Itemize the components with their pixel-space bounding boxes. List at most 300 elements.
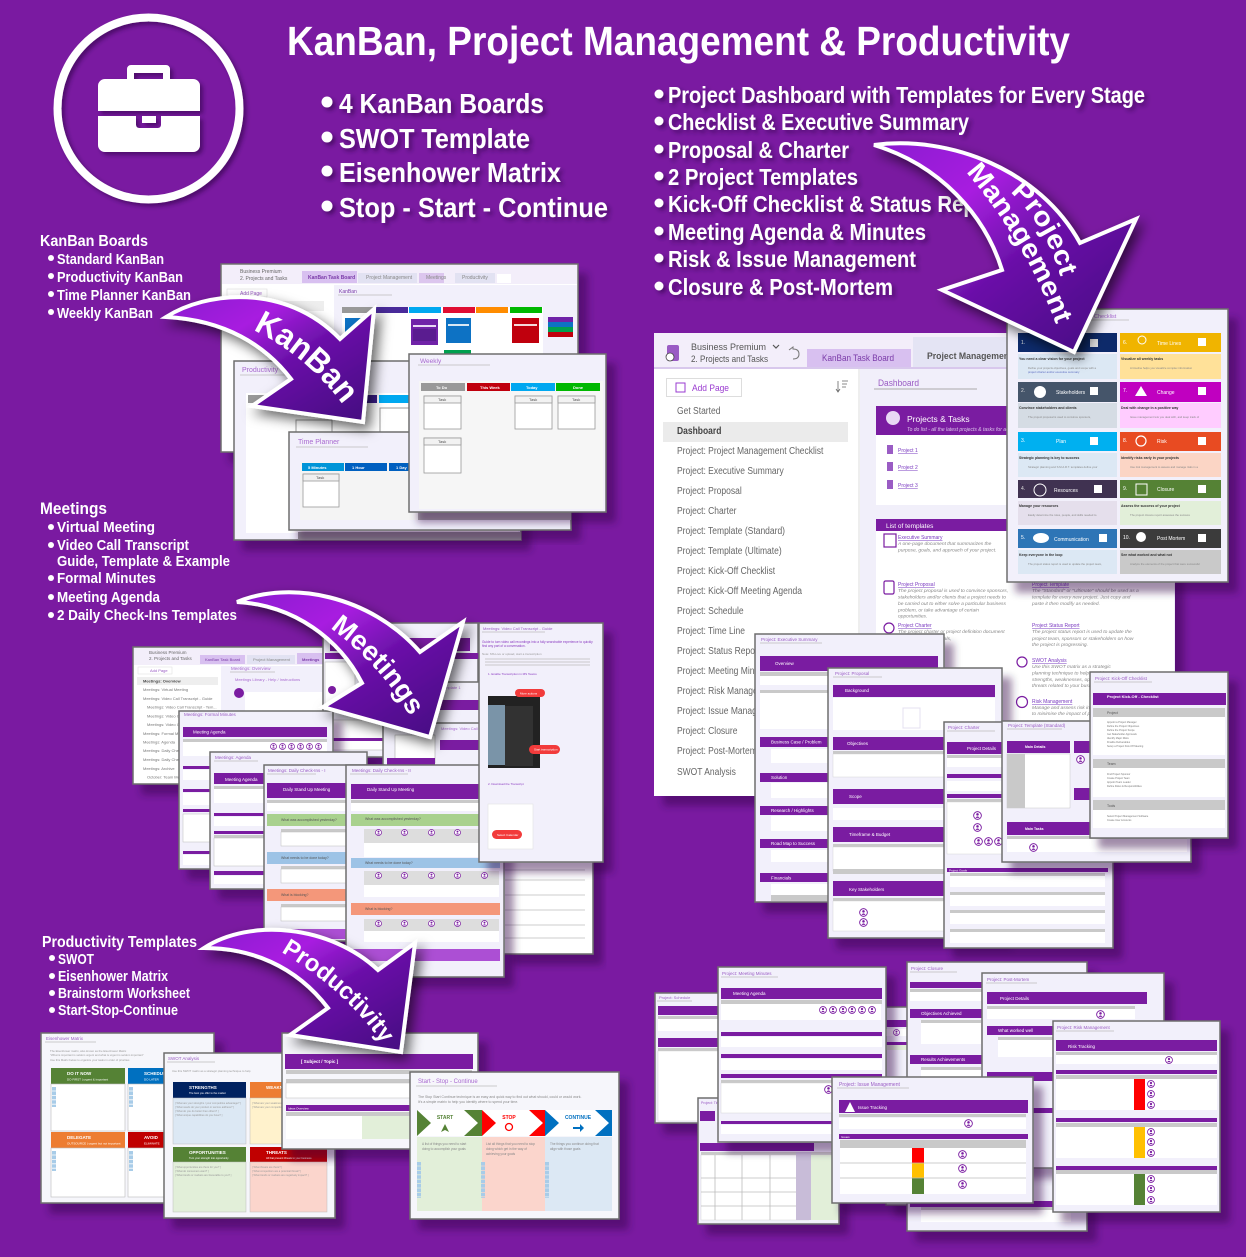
panel: KanBan Task Board screenshot: KanBan: [339, 289, 357, 295]
checklist tile 3: Strategic planning is key to success: [1019, 456, 1079, 460]
panel: Weekly KanBan screenshot: To Do: [436, 385, 448, 390]
panel: Meetings Daily Check-Ins II: What needs to be done today?: [365, 861, 413, 865]
list: Productivity Templates: Brainstorm Worksheet: [58, 985, 190, 1002]
panel: SWOT Analysis: SWOT Analysis: [168, 1056, 200, 1061]
panel: Project Management dashboard screenshot: strengths, weaknesses, opportunities, and: [1032, 677, 1124, 683]
panel: Start Stop Continue: Start - Stop - Continue: [418, 1079, 478, 1085]
checklist tile 4: [1018, 480, 1117, 525]
panel: Project Kick-Off Checklist: Find Project Sponsor: [1107, 773, 1131, 776]
panel: Project Management dashboard screenshot: SWOT Analysis: [1032, 658, 1067, 664]
panel: Project Kick-Off Checklist: [1090, 672, 1228, 838]
panel: Project Management dashboard screenshot: people involved.: [897, 642, 933, 648]
panel: Project Template Standard: Main Tasks: [1025, 827, 1044, 831]
panel: Video Call Transcript guide: 2. Download the Transcript: [488, 782, 524, 786]
panel: Project Kick-Off Checklist: Finalize Deliverables: [1107, 741, 1131, 744]
panel: Project Proposal: Timeframe & Budget: [849, 832, 891, 837]
panel: Project Issue Management: Issues: [841, 1135, 850, 1139]
panel: Start Stop Continue: CONTINUE: [565, 1115, 592, 1121]
checklist tile 8: [1120, 432, 1221, 477]
panel: Start Stop Continue: START: [437, 1115, 453, 1121]
panel: Project Kick-Off Checklist: Identify Major Risks: [1107, 737, 1130, 740]
sidebar page list: [677, 405, 824, 778]
panel: Project Management dashboard screenshot: stakeholders and/or clients that a project needs to: [898, 594, 1006, 600]
button: Add Page: [666, 378, 742, 396]
panel: Brainstorm Worksheet: [282, 1033, 478, 1149]
list: Productivity Templates: Eisenhower Matrix: [58, 968, 169, 985]
panel: Meeting Overview screenshot: Meetings: Archive: [143, 766, 175, 771]
feature list: left column: [322, 88, 608, 223]
sidebar page list: Project: Post-Mortem: [677, 745, 757, 757]
feature list: right column: 2 Project Templates: [668, 164, 858, 190]
arrow: Meetings: [236, 588, 477, 752]
panel: Meeting Overview screenshot: Project Management: [253, 657, 291, 662]
panel: KanBan Task Board screenshot: 2. Projects and Tasks: [240, 276, 288, 282]
list: Meetings: Video Call Transcript: [57, 537, 189, 554]
feature list: right column: Project Dashboard with Templates for Every Stage: [668, 82, 1145, 108]
panel: Project Management dashboard screenshot: Project Proposal: [898, 582, 935, 588]
checklist tile 9: Closure: [1157, 487, 1174, 493]
panel: SWOT Analysis: [ What do consumers want? ]: [175, 1169, 209, 1173]
panel: Project Template Standard: Main Details: [1025, 745, 1045, 749]
panel: Meetings Daily Check-Ins I: What is blocking?: [281, 893, 308, 897]
panel: Project Risk Management: Risk Tracking: [1068, 1044, 1096, 1049]
panel: Eisenhower Matrix: DELEGATE: [67, 1135, 91, 1140]
panel: Project Meeting Minutes: Meeting Agenda: [733, 991, 766, 996]
sidebar page list: Project: Executive Summary: [677, 465, 784, 477]
arrow: Productivity: [197, 924, 430, 1066]
list: KanBan Boards: Standard KanBan: [57, 251, 164, 268]
sidebar page list: Project: Time Line: [677, 625, 745, 637]
panel: Project Management dashboard screenshot: purpose, goals, and approach of your project.: [897, 548, 996, 554]
panel: Project Schedule: [655, 993, 723, 1123]
panel: Eisenhower Matrix: [41, 1033, 214, 1203]
panel: SWOT Analysis: Use this SWOT matrix as a strategic planning technique to help: [172, 1069, 251, 1073]
feature list: right column: Risk & Issue Management: [668, 246, 916, 272]
panel: Project Issue Management: [832, 1077, 1033, 1203]
panel: Project Kick-Off Checklist: Setup a Project Kick-Off Meeting: [1107, 745, 1144, 748]
panel: Project Closure: Results Achievements: [921, 1057, 966, 1062]
feature list: right column: Meeting Agenda & Minutes: [668, 219, 926, 245]
panel: Video Call Transcript example: [383, 723, 483, 773]
panel: Eisenhower Matrix: DO IT NOW: [67, 1071, 92, 1076]
panel: Meeting Overview screenshot: Meetings: Daily Chec: [143, 748, 181, 753]
checklist tile 9: Assess the success of your project: [1121, 504, 1181, 508]
panel: Project Post-Mortem: What worked well: [998, 1028, 1033, 1033]
feature list: left column: SWOT Template: [339, 123, 530, 154]
checklist tile 3: Plan: [1056, 439, 1066, 445]
panel: Project Charter: Project Details: [967, 746, 997, 751]
panel: Start Stop Continue: It's a simple matrix to help you identify where to spend your time.: [418, 1100, 518, 1104]
panel: SWOT Analysis: Turn your strength into opportunity: [189, 1156, 229, 1160]
checklist tile 6: A timeline helps you visualize complex information: [1130, 366, 1193, 370]
panel: SWOT Analysis: [ What trends or markets are negatively impact? ]: [252, 1173, 309, 1177]
list: Meetings: Formal Minutes: [57, 570, 156, 587]
panel: Start Stop Continue: doing which get in the way of: [486, 1147, 527, 1151]
panel: Project Management dashboard screenshot: Projects & Tasks: [907, 414, 970, 424]
list: Meetings: Virtual Meeting: [57, 519, 155, 536]
panel: SWOT Analysis: [ What opportunities are there for you? ]: [175, 1165, 221, 1169]
panel: SWOT Analysis: [ What trends or markets are favourable to you? ]: [175, 1173, 232, 1177]
panel: Project Time Line: Project: Time Line: [701, 1101, 729, 1105]
panel: Video Call Transcript guide: find any part of a conversation.: [482, 644, 526, 648]
panel: SWOT Analysis: [ What do you do better than others? ]: [175, 1109, 219, 1113]
panel: Start Stop Continue: The things you continue doing that: [550, 1142, 599, 1146]
panel: Video Call Transcript guide: Meetings: Video Call Transcript - Guide: [483, 626, 553, 631]
arrow: Project Management: Project: [1012, 180, 1076, 276]
panel: Meetings Daily Check-Ins II: Daily Stand Up Meeting: [367, 787, 415, 792]
panel: Project Kick-Off Checklist: Tools: [1107, 804, 1115, 808]
panel: Meetings Daily Check-Ins II: [346, 765, 504, 977]
panel: Meeting Overview screenshot: [133, 647, 333, 784]
panel: Project Management dashboard screenshot: Executive Summary: [898, 535, 943, 541]
panel: Project Kick-Off Checklist: Project: [1107, 711, 1118, 715]
list: Productivity Templates: SWOT: [58, 951, 94, 968]
checklist tile 7: [1120, 382, 1221, 428]
panel: Video Call Transcript guide: Start transcription: [534, 748, 558, 752]
list: KanBan Boards: Weekly KanBan: [57, 305, 153, 322]
sidebar page list: Project: Schedule: [677, 605, 744, 617]
feature list: left column: Stop - Start - Continue: [339, 192, 608, 223]
checklist tile 5: 5.: [1021, 535, 1025, 541]
panel: Start Stop Continue: List all things that you need to stop: [486, 1142, 535, 1146]
panel: Project Kick-Off Checklist: Create Project Team: [1107, 777, 1130, 780]
panel: Eisenhower Matrix: SCHEDULE: [144, 1071, 169, 1076]
checklist tile 6: Visualize all weekly tasks: [1121, 357, 1163, 361]
panel: Meeting Overview screenshot: 2. Projects and Tasks: [149, 656, 192, 661]
sidebar page list: Project: Template (Ultimate): [677, 545, 782, 557]
panel: KanBan Task Board screenshot: Add Page: [240, 291, 262, 297]
panel: Project Template Standard: Project: Template (Standard): [1008, 723, 1066, 728]
panel: Project Kick-Off Checklist: Appoint Team Leader: [1107, 781, 1131, 784]
panel: Project Issue Management: Project: Issue Management: [839, 1082, 900, 1088]
panel: Project Kick-Off Checklist: Appoint a Project Manager: [1107, 721, 1137, 724]
panel: Project Closure: Project: Closure: [911, 966, 944, 971]
panel: Meetings Formal Minutes: Meeting Agenda: [193, 730, 226, 734]
list: KanBan Boards: Time Planner KanBan: [57, 287, 191, 304]
panel: Project Management dashboard screenshot: Project Charter: [898, 623, 932, 629]
panel: Project Management dashboard screenshot: A one-page document that summarizes the: [897, 541, 992, 547]
panel: Project Management dashboard screenshot: threats related to your business.: [1032, 683, 1102, 689]
panel: Project Meeting Minutes: [718, 967, 886, 1142]
panel: Weekly KanBan screenshot: Task: [529, 397, 537, 402]
panel: Project Executive Summary: Road Map to Success: [771, 841, 816, 846]
panel: Time Planner screenshot: 5 Minutes: [308, 465, 327, 470]
panel: Project Closure: Objectives Achieved: [921, 1011, 962, 1016]
panel: SWOT Analysis: [ What are your weaknesses? ]: [252, 1101, 288, 1105]
checklist tile 4: 4.: [1021, 486, 1025, 492]
panel: Project Proposal: [828, 668, 1002, 938]
panel: Project Management dashboard screenshot: Project Status Report: [1032, 623, 1080, 629]
sidebar page list: Project: Proposal: [677, 485, 742, 497]
panel: Project Management dashboard screenshot: The project status report is used to update the: [1032, 629, 1132, 635]
panel: Time Planner screenshot: Time Planner: [298, 439, 340, 446]
panel: Meetings Daily Check-Ins II: What is blocking?: [365, 907, 392, 911]
panel: Start Stop Continue: align with those goals: [550, 1147, 581, 1151]
list: Meetings: [40, 499, 237, 624]
panel: Time Planner screenshot: Task: [316, 475, 324, 480]
panel: Meeting Overview screenshot: Meetings: Virtual Meeting: [143, 687, 188, 692]
panel: Project Kick-Off Checklist: Get Stakeholder Approvals: [1107, 733, 1137, 736]
panel: KanBan Task Board screenshot: Project Management: [366, 275, 413, 281]
panel: Meeting Overview screenshot: KanBan Task Board: [205, 657, 240, 662]
checklist tile 6: 6.: [1123, 340, 1127, 346]
checklist tile 1: project charter and/or executive summary: [1028, 370, 1080, 374]
panel: Video Call Transcript, blank transcript doc: [503, 800, 593, 954]
panel: Project Proposal: Project: Proposal: [835, 671, 869, 676]
panel: Meeting Overview screenshot: Meetings Library - Help / Instructions: [235, 677, 300, 682]
panel: Project Kick-Off Checklist: Define the Project Objectives: [1107, 725, 1140, 728]
panel: Project Management dashboard screenshot: to minimise the impact of problems: [1032, 711, 1108, 717]
checklist tile 10: [1120, 529, 1221, 574]
arrow: Meetings: Meetings: [332, 614, 420, 714]
panel: Eisenhower Matrix: Use this Matrix below to organize your tasks in order of priorities: [50, 1058, 130, 1062]
panel: Project Management dashboard screenshot: planning technique to help you identify: [1031, 670, 1116, 676]
panel: Meetings Daily Check-Ins I: What was accomplished yesterday?: [281, 818, 337, 822]
panel: Video Call Transcript example: Meetings: Video Call Tr: [441, 726, 483, 731]
panel: Start Stop Continue: achieving your goals: [486, 1152, 515, 1156]
panel: Eisenhower Matrix: Eisenhower Matrix: [46, 1036, 84, 1041]
panel: Meetings Daily Check-Ins I: Daily Stand Up Meeting: [283, 787, 331, 792]
panel: Eisenhower Matrix: DO LATER: [144, 1078, 160, 1082]
panel: Meetings Agenda: Meeting Agenda: [225, 777, 258, 782]
list: KanBan Boards: KanBan Boards: [40, 233, 148, 250]
arrow: Productivity: Productivity: [282, 938, 393, 1040]
list: Meetings: Meeting Agenda: [57, 589, 161, 606]
panel: Video Call Transcript guide: Guide to turn video call recordings into a fully searchable experience to quickly: [482, 640, 593, 644]
panel: Eisenhower Matrix: "What is important is seldom urgent and what is urgent is seldom important": [50, 1053, 144, 1057]
list: Productivity Templates: [42, 934, 197, 1019]
panel: Weekly KanBan screenshot: Done: [573, 385, 584, 390]
button: Add Page: Add Page: [692, 383, 729, 394]
feature list: left column: 4 KanBan Boards: [339, 88, 544, 119]
sidebar page list: Project: Issue Management: [677, 705, 781, 717]
panel: Meeting Overview screenshot: October: Team Mee: [147, 774, 183, 780]
checklist tile 9: The project closure report assesses the success: [1130, 513, 1190, 517]
icon: briefcase logo: [58, 18, 240, 200]
panel: Video Call Transcript template: Template 1: [441, 685, 461, 690]
checklist tile 5: [1018, 529, 1117, 574]
panel: Meetings Agenda: [210, 752, 367, 889]
panel: Project Post-Mortem: Project: Post-Mortem: [987, 977, 1030, 982]
panel: Start Stop Continue: doing to accomplish your goals: [422, 1147, 466, 1151]
list: KanBan Boards: [40, 233, 191, 322]
panel: Weekly KanBan screenshot: This Week: [480, 385, 500, 390]
panel: Project Template Standard: [1002, 721, 1191, 862]
panel: Meetings Daily Check-Ins I: Meetings: Daily Check-Ins - I: [268, 768, 326, 773]
panel: Video Call Transcript guide: Note: MS-Live or upload, start a transcription: [482, 652, 542, 656]
panel: Video Call Transcript template: [435, 682, 495, 752]
panel: Project Executive Summary: Overview: [775, 661, 795, 666]
panel: SWOT Analysis: [164, 1053, 335, 1218]
panel: Project Proposal: Scope: [849, 794, 862, 799]
panel: Project Management dashboard screenshot: List of templates: [886, 523, 934, 530]
panel: Project Management dashboard screenshot: Dashboard: [878, 378, 919, 388]
sidebar page list: Project: Meeting Minutes: [677, 665, 771, 677]
panel: Project Issue Management: Issue Tracking: [858, 1105, 888, 1110]
panel: Weekly KanBan screenshot: Weekly: [420, 358, 442, 365]
sidebar page list: Project: Kick-Off Meeting Agenda: [677, 585, 803, 597]
panel: Project Executive Summary: Business Case / Problem: [771, 740, 822, 744]
panel: Time Planner screenshot: [289, 432, 571, 530]
panel: KanBan Task Board screenshot: Productivity: [462, 275, 488, 281]
panel: Eisenhower Matrix: The Eisenhower matrix, also known as the Eisenhower Matrix: [50, 1049, 127, 1053]
panel: Project Risk Management: Project: Risk Management: [1057, 1025, 1111, 1030]
checklist tile 7: Change: [1157, 390, 1175, 396]
panel: SWOT Analysis: STRENGTHS: [189, 1085, 217, 1090]
checklist tile 8: Risk: [1157, 439, 1167, 445]
panel: Meeting template behind: [323, 623, 480, 757]
panel: Project Management dashboard screenshot: Manage and assess risk in a: [1032, 705, 1094, 711]
panel: Eisenhower Matrix: AVOID: [144, 1135, 159, 1140]
panel: Meeting Overview screenshot: Meetings: Video Call Transcript - Guide: [143, 696, 213, 701]
panel: Meetings Formal Minutes: [179, 711, 333, 869]
arrow: Project Management: [873, 140, 1148, 367]
panel: Meeting Overview screenshot: Meetings: Video Call: [147, 722, 184, 727]
panel: Project Management dashboard screenshot: Risk Management: [1032, 699, 1073, 705]
feature list: right column: Kick-Off Checklist & Status Report: [668, 191, 1003, 217]
panel: Project Management dashboard screenshot: objectives, scope, goals,: [898, 636, 951, 642]
panel: Project Management dashboard screenshot: Project 2: [898, 465, 918, 471]
panel: Weekly KanBan screenshot: Task: [572, 397, 580, 402]
panel: Project Schedule: Project: Schedule: [659, 995, 691, 1000]
arrow: Project Management: Management: [967, 162, 1072, 324]
panel: Project Management dashboard screenshot: [654, 333, 1175, 796]
panel: Weekly KanBan screenshot: [409, 354, 606, 512]
panel: SWOT Analysis: [ What needs do your product or service address? ]: [175, 1105, 234, 1109]
list: Meetings: Guide, Template & Example: [57, 553, 230, 570]
panel: Project Kick-Off Checklist: Team: [1107, 762, 1116, 766]
panel: Project Management dashboard screenshot: be carried out to either solve a particular business: [898, 601, 1006, 607]
checklist tile 5: The project status report is used to update the project team,: [1028, 562, 1102, 566]
panel: SWOT Analysis: WEAKNESSES: [266, 1085, 298, 1090]
checklist tile 1: You need a clear vision for your project: [1019, 357, 1085, 361]
panel: Project Management dashboard screenshot: Project 1: [898, 448, 918, 454]
panel: Project Charter: Project Goals: [949, 868, 968, 872]
checklist tile 4: Easily determine the roles, people, and skills needed to: [1028, 513, 1097, 517]
panel: Project Closure: [907, 962, 1087, 1231]
panel: Meeting Overview screenshot: Meetings: Daily Chec: [143, 757, 181, 762]
checklist tile 6: [1120, 333, 1221, 379]
checklist tile 1: [1018, 333, 1117, 379]
checklist tile 8: Use risk management to assess and manage risks in a: [1130, 465, 1198, 469]
panel: Project Management dashboard screenshot: To do list - all the latest projects & tasks for action: [907, 427, 1017, 433]
panel: Project Executive Summary: Financials: [771, 876, 792, 880]
panel: Project Management dashboard screenshot: KanBan Task Board: [822, 353, 894, 364]
sidebar page list: Project: Charter: [677, 505, 737, 517]
panel: Meeting Overview screenshot: Meetings: Video Call Transcript - Tem...: [147, 704, 217, 710]
panel: Brainstorm Worksheet: Ideas Overview: [288, 1106, 310, 1110]
checklist tile 9: [1120, 480, 1221, 525]
panel: Video Call Transcript guide: 1. Enable Transcription in MS Teams: [488, 672, 537, 676]
panel: Project Management dashboard screenshot: The project charter or project definition document: [898, 629, 1005, 635]
checklist tile 10: Post Mortem: [1157, 536, 1185, 542]
feature list: right column: Checklist & Executive Summary: [668, 109, 969, 135]
list: Productivity Templates: Productivity Templates: [42, 934, 197, 951]
sidebar page list: Project: Template (Standard): [677, 525, 785, 537]
checklist tile 6: Time Lines: [1157, 341, 1182, 347]
checklist tile 7: Issue management lets you deal with, and keep track of: [1130, 415, 1199, 419]
panel: SWOT Analysis: The best you offer to the market: [189, 1091, 226, 1095]
arrow: KanBan: [160, 292, 390, 438]
panel: Project Kick-Off Checklist: Define the Project Scope: [1107, 729, 1135, 732]
panel: Start Stop Continue: [410, 1072, 619, 1219]
panel: Project Management dashboard screenshot: opportunities.: [898, 614, 927, 620]
panel: Project Proposal: Background: [845, 688, 870, 693]
checklist tile 1: Define your projects objectives, goals and scope with a: [1028, 366, 1097, 370]
panel: Time Planner screenshot: 1 Day: [396, 465, 407, 470]
panel: SWOT Analysis: All that present threats to your business: [266, 1156, 312, 1160]
sidebar page list: Project: Project Management Checklist: [677, 445, 824, 457]
panel: Meetings Agenda: Meetings: Agenda: [215, 755, 252, 760]
panel: Project Meeting Minutes: Project: Meeting Minutes: [722, 971, 772, 976]
panel: Meeting Overview screenshot: Meetings: Overview: [143, 678, 181, 684]
panel: Project Executive Summary: Project: Executive Summary: [761, 637, 818, 642]
panel: KanBan Task Board screenshot: Meetings: [426, 275, 447, 281]
panel: Project Kick-Off Checklist: Project: Kick-Off Checklist: [1095, 676, 1148, 681]
checklist tile 7: 7.: [1123, 388, 1127, 394]
panel: SWOT Analysis: [ What competitors are a potential threat? ]: [252, 1169, 301, 1173]
panel: Video Call Transcript guide: [479, 623, 603, 862]
panel: Project Charter: [944, 722, 1113, 948]
checklist tile 10: 10.: [1123, 535, 1130, 541]
panel: Project Status Report behind: [886, 1007, 916, 1205]
panel: Project Time Line: [698, 1098, 839, 1224]
panel: Weekly KanBan screenshot: Task: [438, 397, 446, 402]
panel: Meeting Overview screenshot: Business Premium: [149, 650, 187, 655]
arrow: KanBan: KanBan: [255, 310, 354, 404]
checklist tile 8: 8.: [1123, 438, 1127, 444]
panel: Weekly KanBan screenshot: Task: [438, 439, 446, 444]
panel: Meetings Daily Check-Ins I: What needs to be done today?: [281, 856, 329, 860]
panel: Video Call Transcript guide: Select Calendar: [497, 833, 518, 837]
panel: Brainstorm Worksheet: [ Subject / Topic ]: [301, 1059, 339, 1064]
title: KanBan, Project Management & Productivity: [287, 18, 1070, 64]
panel: Project Proposal: Objectives: [847, 741, 869, 746]
panel: Project Management Checklist: [1007, 309, 1228, 582]
panel: Project Charter: Project: Charter: [948, 725, 980, 730]
checklist tile 4: Manage your resources: [1019, 504, 1058, 508]
panel: Project Management dashboard screenshot: Project Management: [927, 351, 1013, 362]
checklist tile 5: Communication: [1054, 537, 1089, 543]
panel: Project Management dashboard screenshot: problem, or take advantage of certain: [897, 608, 979, 614]
panel: Project Management dashboard screenshot: Project Template: [1032, 582, 1069, 588]
panel: Project Management dashboard screenshot: 2. Projects and Tasks: [691, 354, 768, 365]
sidebar page list: SWOT Analysis: [677, 766, 736, 778]
sidebar page list: Project: Closure: [677, 725, 737, 737]
panel: Eisenhower Matrix: OUTSOURCE | urgent but not important: [67, 1142, 121, 1146]
panel: Meetings Daily Check-Ins II: Meetings: Daily Check-Ins - II: [352, 768, 411, 773]
panel: SWOT Analysis: OPPORTUNITIES: [189, 1150, 226, 1155]
panel: Weekly KanBan screenshot: Today: [526, 385, 538, 390]
panel: Project Management dashboard screenshot: The "Standard" or "Ultimate" should be used as a: [1032, 588, 1139, 594]
panel: Video Call Transcript guide: More actions: [520, 692, 538, 696]
panel: KanBan Task Board screenshot: [221, 264, 578, 452]
panel: Project Proposal: Key Stakeholders: [849, 887, 885, 892]
sidebar page list: Project: Risk Management: [677, 685, 777, 697]
panel: Time Planner screenshot: 1 Hour: [352, 465, 365, 470]
feature list: right column: Closure & Post-Mortem: [668, 274, 893, 300]
panel: SWOT Analysis: [ What unique capabilities do you have? ]: [175, 1113, 223, 1117]
panel: Project Executive Summary: [755, 634, 944, 902]
checklist tile 3: [1018, 432, 1117, 477]
checklist tile 2: The project proposal is used to convince sponsors,: [1028, 415, 1091, 419]
panel: Project Management dashboard screenshot: The project proposal is used to convince sponsors,: [898, 588, 1008, 594]
panel: KanBan Task Board screenshot: KanBan Task Board: [308, 275, 355, 281]
panel: Project Kick-Off Checklist: Select Project Management Software: [1107, 815, 1149, 818]
panel: Project Management dashboard screenshot: Use this SWOT matrix as a strategic: [1032, 664, 1111, 670]
checklist tile 2: Convince stakeholders and clients: [1019, 406, 1077, 410]
feature list: right column: Proposal & Charter: [668, 137, 849, 163]
